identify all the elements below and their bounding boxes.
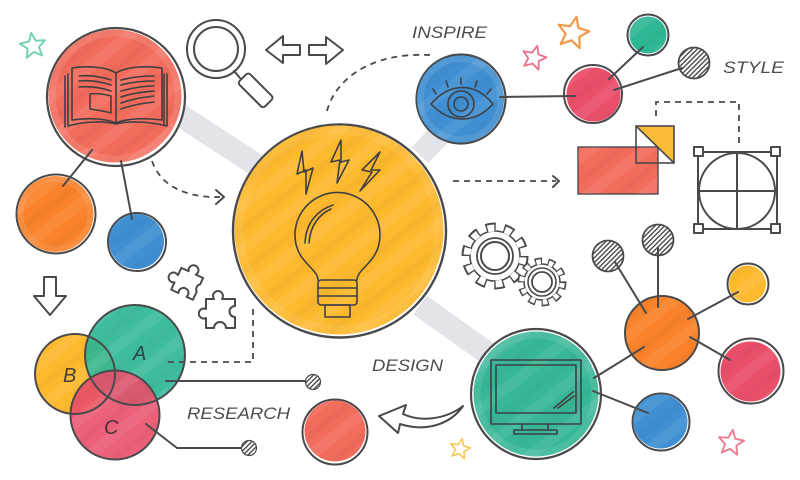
venn circle B [35, 334, 115, 414]
circle: yellow design node [728, 264, 768, 304]
star: teal [19, 31, 47, 58]
icon: left arrow [266, 36, 300, 63]
hatched dot: A endpoint [306, 374, 320, 390]
icon: small gear [521, 261, 563, 303]
icon: right arrow [309, 37, 343, 64]
star: yellow bottom [448, 437, 472, 459]
icon: magnifying glass [187, 20, 274, 108]
circle: green monitor node [471, 329, 601, 459]
icon: computer monitor [491, 360, 581, 434]
shapes: rectangle and triangle [578, 126, 674, 194]
heading: DESIGN: DESIGN [372, 356, 444, 375]
venn outlines [35, 305, 185, 460]
dashed curve arrow to inspire [327, 55, 430, 111]
venn label C: C [104, 417, 119, 439]
circle: blue left node [108, 213, 166, 271]
circle: green style node [628, 14, 668, 56]
icon: open book [65, 67, 167, 127]
star: pink bottom [717, 428, 745, 455]
circle: red book node [47, 28, 185, 166]
icon: large gear [466, 227, 524, 285]
heading: INSPIRE: INSPIRE [412, 23, 488, 42]
icon: puzzle piece upper [164, 257, 206, 300]
icon: curved arrow from monitor to red node [379, 405, 463, 433]
icon: light bulb [295, 192, 380, 317]
heading: STYLE: STYLE [723, 58, 785, 77]
venn circle A [85, 305, 185, 405]
circle: orange left node [16, 174, 96, 254]
circle: hatched style node [678, 48, 710, 78]
star: pink top [520, 43, 549, 71]
circle: hatched node upper right [642, 224, 674, 256]
icon: puzzle piece lower [199, 291, 235, 328]
hatched dot: C endpoint [242, 440, 256, 456]
dashed curve arrow: book to bulb [152, 161, 224, 204]
circle: red lower node [302, 400, 368, 464]
thin connector lines over nodes [63, 47, 738, 448]
connector bands [175, 112, 490, 355]
venn circle C [71, 371, 159, 459]
venn label A: A [132, 343, 146, 365]
circle: blue eye node [416, 54, 506, 144]
dashed arrow: bulb to shapes [453, 176, 559, 187]
venn diagram [35, 305, 185, 460]
dashed connector: venn to puzzle [168, 305, 253, 362]
icon: eye [431, 78, 493, 119]
circle: orange design node [625, 296, 699, 370]
icon: circle in selection frame [694, 147, 780, 233]
circle: pink style node [564, 65, 622, 123]
dashed connector: shapes to frame [656, 102, 739, 146]
circle: yellow light bulb hub [233, 124, 446, 338]
heading: RESEARCH: RESEARCH [187, 404, 291, 423]
circle: hatched node upper left [592, 240, 624, 272]
circle: blue design node [632, 394, 690, 450]
star: orange [555, 14, 592, 49]
venn label B: B [63, 365, 76, 387]
circle: pink design node [718, 338, 784, 404]
icon: down arrow [34, 277, 66, 315]
icon: lightning bolts [297, 140, 380, 194]
